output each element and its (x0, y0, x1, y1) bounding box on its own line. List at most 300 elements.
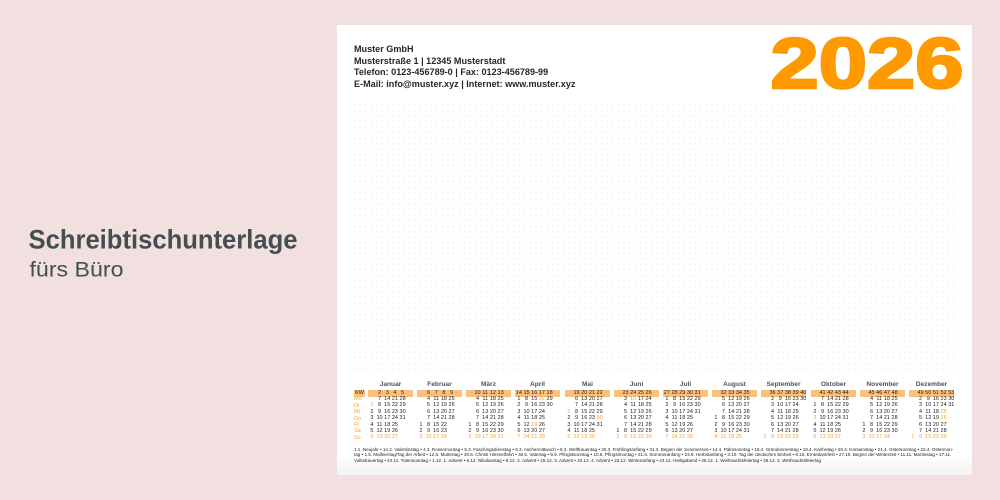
month: April: 18 (547, 390, 553, 396)
month: Oktober: 27 (835, 434, 841, 440)
month: Juni: 2 (616, 434, 619, 440)
month: November: 27 (892, 409, 898, 415)
month: September: 4 (771, 409, 774, 415)
month: Oktober: 43 (835, 390, 841, 396)
month: Januar: 23 (392, 409, 398, 415)
month: September: 39 (793, 390, 799, 396)
month: Juli: 29 (679, 390, 685, 396)
month: November: 25 (892, 396, 898, 402)
month: April: 21 (531, 434, 537, 440)
month: Mai: Mai (582, 380, 593, 388)
month: Dezember: 17 (933, 402, 939, 408)
month: Juni: 12 (630, 409, 636, 415)
month: Juni: 26 (646, 409, 652, 415)
month: Januar: 2 (370, 409, 373, 415)
month: Februar: 15 (433, 422, 439, 428)
month: September: 10 (777, 402, 783, 408)
month: April: 6 (517, 428, 520, 434)
month: Juni: 21 (638, 422, 644, 428)
month: November: 23 (884, 428, 890, 434)
month: Januar: 25 (392, 422, 398, 428)
month: Januar: 1 (370, 402, 373, 408)
month: Mai: 2 (567, 415, 570, 421)
month: November: 30 (892, 428, 898, 434)
month: Juli: 27 (664, 390, 670, 396)
month: Januar: 18 (384, 422, 390, 428)
month: Januar: 10 (376, 415, 383, 421)
month: Januar: 5 (370, 428, 373, 434)
month: November: 28 (892, 415, 898, 421)
month: März: 11 (482, 396, 488, 402)
month: Dezember: 7 (919, 428, 922, 434)
month: Dezember: 16 (933, 396, 939, 402)
month: Dezember: 21 (933, 428, 939, 434)
month: Januar: 19 (384, 428, 390, 434)
month: Mai: 11 (574, 428, 579, 434)
month: März: 26 (498, 402, 504, 408)
month: August: 17 (728, 428, 734, 434)
month: Oktober: 30 (843, 409, 849, 415)
month: März: 10 (474, 390, 481, 396)
month: Januar: 8 (378, 402, 381, 408)
month: September: 20 (785, 422, 791, 428)
month: Februar: 6 (427, 409, 430, 415)
month: Juli: 21 (679, 434, 685, 440)
month: September: 25 (793, 409, 799, 415)
month: Juli: 8 (673, 396, 676, 402)
month: Dezember: 13 (925, 422, 931, 428)
month: November: 46 (876, 390, 882, 396)
month: Januar: 27 (392, 434, 398, 440)
month: April: 17 (539, 390, 545, 396)
month: April: 15 (523, 390, 530, 396)
month: Juni: 19 (638, 409, 644, 415)
heading: Schreibtischunterlage: Schreibtischunterlage (28, 224, 298, 254)
month: August: 34 (736, 390, 742, 396)
month: Oktober: 10 (819, 415, 826, 421)
month: April: 24 (539, 409, 545, 415)
month: Mai: 30 (597, 415, 603, 421)
weekday labels: KW (355, 390, 364, 396)
month: Oktober: 28 (843, 396, 849, 402)
month: September: 27 (793, 422, 799, 428)
month: Mai: 1 (567, 409, 570, 415)
month: Januar: 21 (392, 396, 398, 402)
month: September: 14 (777, 428, 783, 434)
month: September: 1 (763, 434, 766, 440)
month: August: 12 (728, 396, 734, 402)
month: Juli: 28 (671, 390, 678, 396)
month: Oktober: 23 (835, 409, 841, 415)
month: März: 15 (482, 422, 488, 428)
month: Juni: 27 (646, 415, 652, 421)
month: April: 17 (531, 409, 537, 415)
month: März: März (481, 380, 496, 388)
month: Mai: 22 (589, 409, 595, 415)
month: September: 8 (771, 434, 774, 440)
month: April: 16 (531, 390, 537, 396)
weekday labels: Mo (354, 396, 362, 402)
month: Juli: 20 (679, 428, 685, 434)
month: März: 21 (490, 415, 496, 421)
month: Juni: Juni (630, 380, 643, 388)
month: April: 3 (517, 409, 520, 415)
month: November: 47 (884, 390, 890, 396)
month: September: 2 (771, 396, 774, 402)
month: August: 23 (736, 422, 742, 428)
month: Juli: 3 (665, 409, 668, 415)
month: Oktober: 17 (827, 415, 833, 421)
month: Oktober: 11 (820, 422, 825, 428)
month: Juni: 25 (638, 390, 644, 396)
month: Juli: 22 (687, 396, 693, 402)
month: Mai: 19 (581, 434, 587, 440)
month: Oktober: 41 (819, 390, 826, 396)
month: April: 13 (523, 428, 530, 434)
month: März: 10 (474, 434, 481, 440)
month: November: 6 (870, 409, 873, 415)
month: September: 26 (793, 415, 799, 421)
month: Mai: 19 (573, 390, 580, 396)
company address block: Musterstraße 1 | 12345 Musterstadt (354, 56, 505, 66)
month: August: 26 (744, 396, 750, 402)
month: Februar: 6 (427, 390, 430, 396)
month: Juni: 3 (624, 396, 627, 402)
month: November: 17 (876, 434, 882, 440)
month: März: 1 (468, 422, 471, 428)
month: Februar: 7 (427, 415, 430, 421)
month: Juni: 16 (630, 434, 636, 440)
month: Dezember: 20 (933, 422, 939, 428)
month: Mai: 6 (575, 396, 578, 402)
month: August: 30 (744, 422, 750, 428)
month: August: 2 (714, 422, 717, 428)
month: Februar: 3 (419, 434, 422, 440)
month: November: 24 (884, 434, 890, 440)
month: Oktober: 29 (843, 402, 849, 408)
month: März (466, 380, 511, 440)
month: August: 14 (728, 409, 734, 415)
month: August: 7 (722, 409, 725, 415)
month: Juli: 28 (687, 434, 693, 440)
month: Juni: 9 (624, 434, 627, 440)
month: September: 5 (771, 415, 774, 421)
month: Dezember: 49 (917, 390, 924, 396)
month: August: 31 (744, 428, 750, 434)
month: Juni: 8 (624, 428, 627, 434)
month: Juli: 30 (695, 402, 701, 408)
month: Juli: 31 (695, 409, 701, 415)
month: Januar: 15 (384, 402, 390, 408)
month: November: 20 (884, 409, 890, 415)
month: Dezember: 24 (941, 402, 947, 408)
month: Juli: 6 (665, 428, 668, 434)
month: Januar: 17 (384, 415, 390, 421)
month: März: 13 (482, 409, 488, 415)
month: September: 24 (793, 402, 799, 408)
month: April (515, 380, 560, 440)
month: Februar: 14 (433, 415, 439, 421)
month: Juni: 29 (646, 428, 652, 434)
month: Januar: 16 (384, 409, 390, 415)
month: September: 16 (785, 396, 791, 402)
month: Juli: 19 (679, 422, 685, 428)
weekday labels: Sa (354, 428, 361, 434)
month: April: 16 (531, 402, 537, 408)
month: März: 22 (490, 422, 496, 428)
weekday labels: Di (354, 403, 359, 409)
month: Januar: 31 (400, 415, 406, 421)
month: Januar: 9 (378, 409, 381, 415)
month: August: 33 (728, 390, 734, 396)
month: Dezember (909, 380, 954, 440)
month: November: 10 (868, 434, 875, 440)
month: Januar: 22 (392, 402, 398, 408)
month: Februar: 20 (441, 409, 447, 415)
month: Februar: 13 (433, 409, 439, 415)
month: Februar: 7 (435, 390, 438, 396)
month: Oktober: 13 (819, 434, 826, 440)
month: Dezember: 52 (941, 390, 947, 396)
month: November: 7 (870, 415, 873, 421)
month: Dezember: 28 (941, 428, 947, 434)
month: Juli: 18 (679, 415, 685, 421)
subheading: fürs Büro: fürs Büro (30, 259, 124, 282)
month: September: 29 (793, 434, 799, 440)
month: Mai: 27 (597, 396, 603, 402)
month: September: 7 (771, 428, 774, 434)
month: April: 1 (517, 396, 520, 402)
month: Juli: 14 (671, 434, 678, 440)
month: Juni: 17 (638, 396, 644, 402)
month: Oktober: 3 (813, 415, 816, 421)
month: Juni: 25 (646, 402, 652, 408)
holiday list footnote: tag • 1.5. Maifeiertag/Tag der Arbeit • 12.5. Muttertag • 30.5. Christi Himmelfahrt • 30.5. Vatertag • 9.6. Pfingstsonntag • 10.6. Pfingstmontag • 21.6. Sommeranfang • 23.9. Herbstanfang • 3.10. Tag der deutschen Einheit • 6.10. Erntedankfest • 27.10. Beginn der Winterzeit • 11.11. Martinstag • 17.11. (354, 452, 951, 457)
month: August (712, 380, 757, 440)
month: Dezember: 51 (933, 390, 939, 396)
month: Mai: 20 (589, 396, 595, 402)
month: November: 22 (884, 422, 890, 428)
month: März: 9 (476, 428, 479, 434)
month: Januar: 4 (370, 422, 373, 428)
month: Dezember: 27 (941, 422, 947, 428)
month: Januar: 3 (370, 415, 373, 421)
month: Februar: 24 (441, 434, 447, 440)
month: Dezember: 12 (925, 415, 931, 421)
month: April: 8 (525, 396, 528, 402)
month: Juni: 23 (638, 434, 644, 440)
month: März: 31 (498, 434, 504, 440)
month: Juli: 1 (665, 396, 668, 402)
month: Mai: 12 (573, 434, 580, 440)
month: Juli: 15 (679, 396, 685, 402)
month: Juni: 14 (630, 422, 636, 428)
month: Juli: Juli (680, 380, 691, 388)
month: Juni: 10 (630, 396, 636, 402)
month: April: 11 (524, 415, 529, 421)
month: September: 17 (785, 402, 791, 408)
month: Dezember: 23 (941, 396, 947, 402)
month: Oktober: 44 (843, 390, 849, 396)
month: Mai: 3 (567, 422, 570, 428)
month: Februar: 18 (441, 396, 447, 402)
company address block: Telefon: 0123-456789-0 | Fax: 0123-456789-99 (354, 67, 548, 77)
month: April: 30 (547, 402, 553, 408)
month: Juli: 12 (671, 422, 678, 428)
month: Oktober: 4 (813, 422, 816, 428)
month: September: 12 (777, 415, 783, 421)
month: September: 22 (785, 434, 791, 440)
month: April: 7 (517, 434, 520, 440)
month: Januar: 29 (400, 402, 406, 408)
month: Dezember: 50 (925, 390, 931, 396)
month: Februar: Februar (427, 380, 452, 388)
month: Juli (663, 380, 708, 440)
month: Juli: 25 (687, 415, 693, 421)
month: Februar: 23 (441, 428, 447, 434)
month: November: 11 (876, 396, 882, 402)
month: Dezember: 2 (919, 396, 922, 402)
month: September: 18 (785, 409, 791, 415)
month: Dezember: 14 (925, 428, 931, 434)
month: Dezember: 29 (941, 434, 947, 440)
month: Oktober: 26 (835, 428, 841, 434)
month: August: 28 (744, 409, 750, 415)
month: März: 3 (468, 434, 471, 440)
month: März: 25 (498, 396, 504, 402)
month: April: 19 (531, 422, 537, 428)
month: September (761, 380, 806, 440)
month: Juni: 7 (624, 422, 627, 428)
month: August: 29 (744, 415, 750, 421)
month: Oktober: 9 (821, 409, 824, 415)
holiday list footnote: 1.1. Neujahr • 14.2. Valentinstag • 4.3. Rosenmontag • 5.3. Faschingsdienstag • 6.3. Aschermittwoch • 8.3. Weltfrauentag • 20.3. Frühlingsanfang • 31.3. Beginn der Sommerzeit • 14.4. Palmsonntag • 18.4. Gründonnerstag • 19.4. Karfreitag • 20.4. Karsamstag • 21.4. Ostersonntag • 22.4. Ostermon- (354, 447, 953, 452)
month: Juni: 1 (616, 428, 619, 434)
month: Januar: 2 (378, 390, 381, 396)
month: März: 20 (490, 409, 496, 415)
month: Mai: 31 (597, 422, 603, 428)
month: August: 25 (736, 434, 742, 440)
month: Mai: 10 (573, 422, 580, 428)
month: Oktober: 12 (819, 428, 826, 434)
month: November: 26 (892, 402, 898, 408)
month: Januar: 26 (392, 428, 398, 434)
month: Oktober: 8 (821, 402, 824, 408)
company address block (354, 44, 576, 89)
month: März: 12 (482, 402, 488, 408)
month: Dezember: 1 (911, 434, 914, 440)
month: Mai: 7 (575, 402, 578, 408)
month: Dezember: 9 (927, 396, 930, 402)
month: März: 12 (490, 390, 496, 396)
month: April: 23 (539, 402, 545, 408)
weekday labels: So (354, 435, 361, 441)
month: August: 11 (721, 434, 726, 440)
month: Juli: 23 (687, 402, 693, 408)
month: Januar: 3 (386, 390, 389, 396)
month: Juli: 17 (679, 409, 685, 415)
month: Februar: 4 (427, 396, 430, 402)
month: Juni: 24 (646, 396, 652, 402)
holiday list footnote (354, 447, 954, 463)
month: Oktober: 42 (827, 390, 833, 396)
month: Juni: 23 (622, 390, 629, 396)
month: April: 18 (531, 415, 537, 421)
month: August: 13 (728, 402, 734, 408)
month: September: 15 (777, 434, 783, 440)
month: Oktober: 16 (827, 409, 833, 415)
month: März: 4 (476, 396, 479, 402)
month: Februar: 25 (449, 396, 455, 402)
month: Oktober: 1 (813, 402, 816, 408)
month: April: 20 (531, 428, 537, 434)
month: März: 7 (476, 415, 479, 421)
month: August: 35 (744, 390, 750, 396)
month: Juni: 28 (646, 422, 652, 428)
month: Oktober (811, 380, 856, 440)
month: Juni: 18 (638, 402, 644, 408)
month: Dezember: 26 (941, 415, 947, 421)
weekday labels: Mi (354, 409, 360, 415)
month: Januar: 4 (393, 390, 396, 396)
month: November: 2 (862, 428, 865, 434)
month: November: 1 (862, 422, 865, 428)
month: Mai: 5 (567, 434, 570, 440)
month: August: 6 (722, 402, 725, 408)
month: Mai: 4 (567, 428, 570, 434)
month: August: 32 (720, 390, 727, 396)
month: November: 21 (884, 415, 890, 421)
month: März: 29 (498, 422, 504, 428)
month: März: 18 (490, 396, 496, 402)
month: September: 19 (785, 415, 791, 421)
month: Dezember: 3 (919, 402, 922, 408)
month: Juni: 15 (630, 428, 636, 434)
month: Februar: 8 (442, 390, 445, 396)
month: August: 22 (736, 415, 742, 421)
month: September: 30 (800, 396, 806, 402)
month: März: 2 (468, 428, 471, 434)
month: Mai: 23 (589, 415, 595, 421)
month: Juli: 26 (687, 422, 693, 428)
company address block: E-Mail: info@muster.xyz | Internet: www.muster.xyz (354, 79, 575, 89)
month: August: 8 (722, 415, 725, 421)
month: Oktober: 2 (813, 409, 816, 415)
month: November: 19 (884, 402, 890, 408)
month: Mai: 13 (581, 396, 587, 402)
month: Juli: 24 (687, 409, 693, 415)
month: Februar: 11 (433, 396, 439, 402)
month: Oktober: 7 (821, 396, 824, 402)
panel: desk pad sheet (337, 25, 972, 475)
month: Juli: 10 (671, 409, 678, 415)
month: März: 27 (498, 409, 504, 415)
month: Juni: 20 (638, 415, 644, 421)
month: Mai: 8 (575, 409, 578, 415)
month: März: 6 (476, 409, 479, 415)
month: Juni: 24 (630, 390, 636, 396)
month: Februar: 26 (449, 402, 455, 408)
month: Februar: 10 (425, 434, 432, 440)
month: Oktober: 20 (827, 434, 833, 440)
month: Januar: 6 (370, 434, 373, 440)
month: Juli: 13 (671, 428, 678, 434)
month: Februar: 12 (433, 402, 439, 408)
month: Februar: 2 (419, 428, 422, 434)
month: Februar: 19 (441, 402, 447, 408)
month: Dezember: 18 (933, 409, 939, 415)
month: November: 15 (876, 422, 882, 428)
